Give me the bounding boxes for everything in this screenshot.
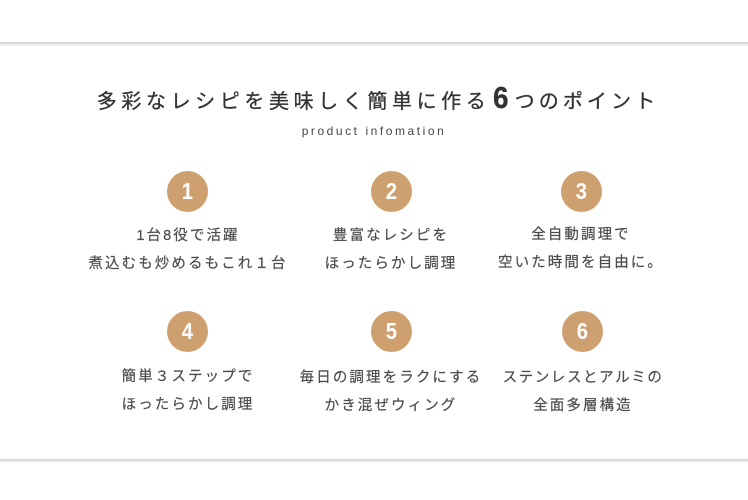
badge 5	[371, 311, 412, 352]
badge 4: 4	[182, 318, 193, 344]
title: 6	[493, 80, 511, 115]
point 2 text line 2: ほったらかし調理	[325, 256, 457, 272]
badge 5: 5	[386, 318, 397, 344]
badge 2	[371, 171, 412, 212]
badge 1: 1	[182, 178, 193, 204]
top divider	[0, 42, 748, 46]
bottom divider	[0, 459, 748, 463]
badge 6	[562, 311, 603, 352]
title	[97, 80, 659, 115]
point 4 text line 2: ほったらかし調理	[122, 397, 254, 413]
point 1 text line 1: 1台8役で活躍	[136, 228, 240, 244]
point 3 text line 1: 全自動調理で	[531, 227, 631, 243]
badge 2: 2	[386, 178, 397, 204]
point 6 text line 2: 全面多層構造	[533, 398, 633, 414]
badge 3: 3	[576, 178, 587, 204]
badge 1	[167, 171, 208, 212]
point 6 text line 1: ステンレスとアルミの	[503, 370, 663, 386]
badge 4	[167, 311, 208, 352]
point 2 text line 1: 豊富なレシピを	[333, 228, 449, 244]
badge 3	[561, 171, 602, 212]
point 1 text line 2: 煮込むも炒めるもこれ１台	[88, 256, 288, 272]
point 4 text line 1: 簡単３ステップで	[122, 369, 254, 385]
badge 6: 6	[577, 318, 588, 344]
point 3 text line 2: 空いた時間を自由に。	[498, 255, 664, 271]
point 5 text line 1: 毎日の調理をラクにする	[300, 370, 482, 386]
title: 多彩なレシピを美味しく簡単に作る つのポイント	[97, 91, 659, 113]
point 5 text line 2: かき混ぜウィング	[325, 398, 457, 414]
subtitle: product infomation	[302, 124, 446, 138]
